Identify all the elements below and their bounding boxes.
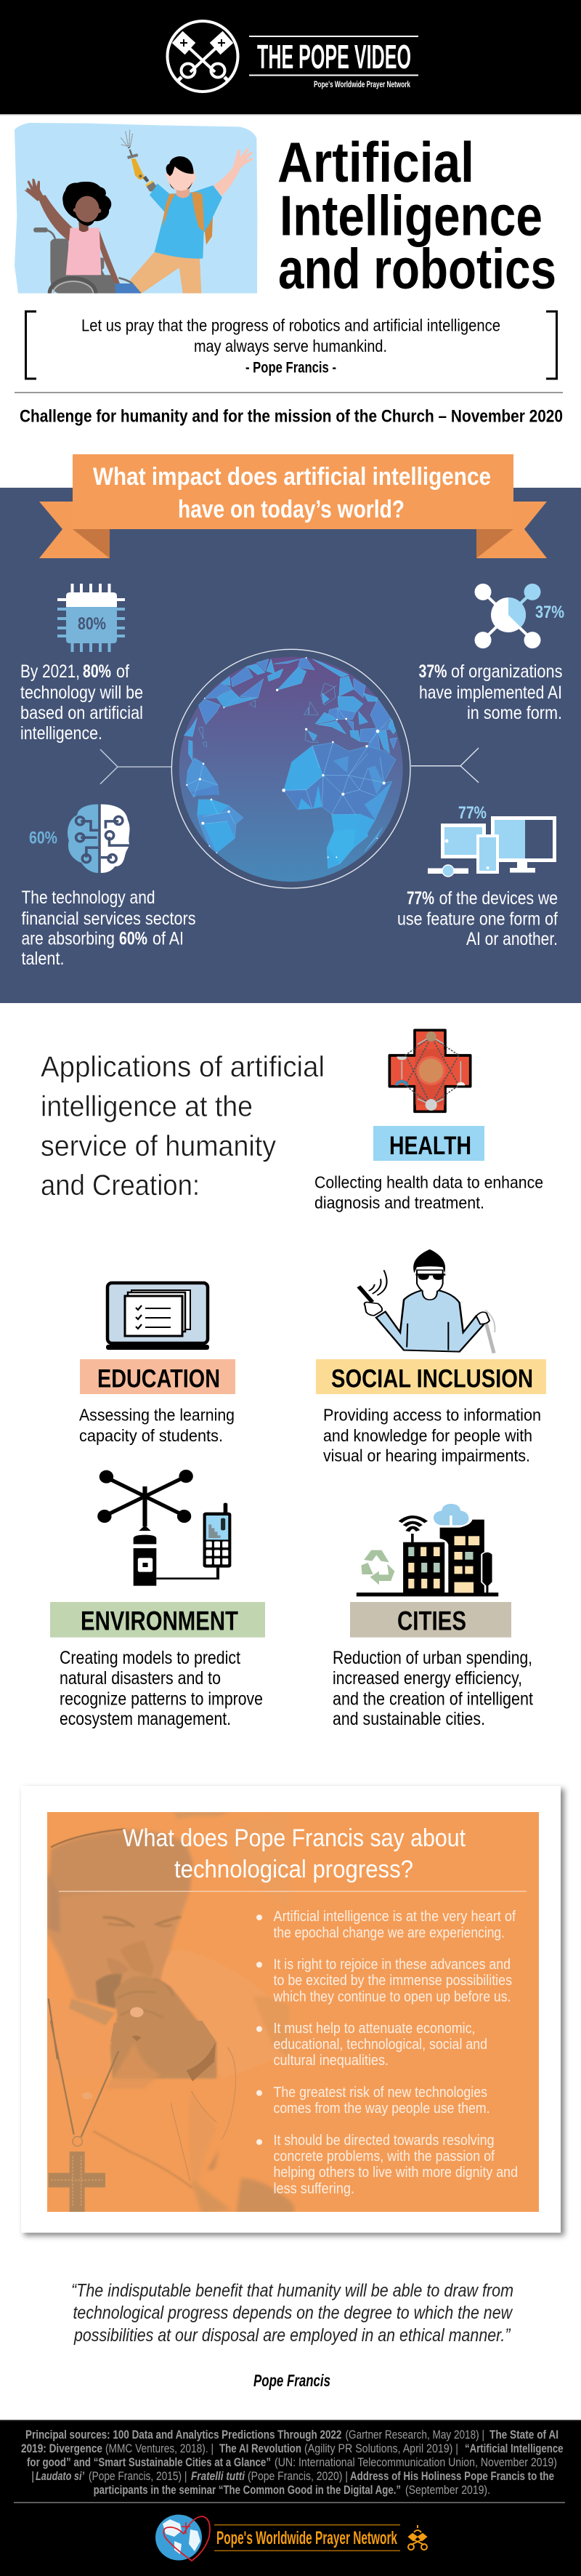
glow nodes xyxy=(186,657,386,858)
panel: environment xyxy=(50,1470,265,1729)
panel: social inclusion: SOCIAL INCLUSION xyxy=(331,1365,533,1393)
closing quote xyxy=(71,2280,513,2346)
icon: person with cane and phone xyxy=(359,1249,495,1353)
stat: 77%: AI or another. xyxy=(466,929,558,949)
prayer intention with brackets: may always serve humankind. xyxy=(194,337,387,355)
panel: environment: recognize patterns to improve xyxy=(60,1689,263,1710)
bullet list: Artificial intelligence is at the very heart of xyxy=(273,1909,516,1925)
stat: 60%: of AI xyxy=(153,929,184,949)
applications heading: and Creation: xyxy=(41,1170,200,1202)
bullet list: the epochal change we are experiencing. xyxy=(273,1925,505,1941)
photo: Pope Francis tinted xyxy=(47,1811,294,2215)
panel: environment: Creating models to predict xyxy=(60,1648,240,1668)
icon: chip 80% xyxy=(57,584,125,652)
closing quote: technological progress depends on the degree to which the new xyxy=(73,2303,513,2323)
icon: connector left xyxy=(100,749,171,784)
panel: cities: Reduction of urban spending, xyxy=(333,1648,532,1668)
applications heading: service of humanity xyxy=(41,1130,276,1162)
continent: europe and asia xyxy=(304,659,397,754)
applications heading: Applications of artificial xyxy=(41,1051,325,1083)
icon: laptop with checklist xyxy=(106,1283,209,1350)
sources: | xyxy=(31,2469,34,2483)
continent: south america xyxy=(187,758,243,853)
stat: 80%: intelligence. xyxy=(20,723,102,744)
icon: chip 80%: 80% xyxy=(78,614,106,634)
bullet list: It is right to rejoice in these advances and xyxy=(273,1957,511,1973)
stat: 80%: By 2021, xyxy=(20,661,80,682)
stat: 80%: 80% xyxy=(83,661,111,682)
main title: Artificial xyxy=(277,130,474,194)
panel: health: Collecting health data to enhance xyxy=(314,1173,543,1192)
closing quote: “The indisputable benefit that humanity will be able to draw from xyxy=(71,2280,513,2301)
sources: (Gartner Research, May 2018) | xyxy=(346,2428,484,2442)
icon: weather station and phone xyxy=(97,1470,231,1586)
panel: environment: ENVIRONMENT xyxy=(81,1606,238,1636)
bullet list: educational, technological, social and xyxy=(273,2037,487,2053)
panel heading: technological progress? xyxy=(174,1856,413,1883)
continent: north america xyxy=(184,658,314,761)
bullet list: It must help to attenuate economic, xyxy=(273,2021,475,2037)
continent: africa xyxy=(284,743,396,869)
icon: connector right xyxy=(411,748,479,783)
panel: social inclusion: Providing access to information xyxy=(323,1406,541,1425)
sources: 2019: Divergence xyxy=(21,2442,102,2455)
stat: 80%: based on artificial xyxy=(20,703,143,723)
header band xyxy=(0,0,581,115)
panel: environment: ecosystem management. xyxy=(60,1709,231,1729)
stat: 60%: are absorbing xyxy=(22,929,115,949)
stat: 60%: financial services sectors xyxy=(22,909,196,929)
stat: 60%: The technology and xyxy=(22,887,155,908)
sources: (MMC Ventures, 2018). | xyxy=(105,2442,214,2455)
bullet list: The greatest risk of new technologies xyxy=(273,2085,487,2101)
panel: health: diagnosis and treatment. xyxy=(314,1193,484,1212)
bullet list xyxy=(256,1909,518,2197)
sources: participants in the seminar “The Common Good in the Digital Age.” xyxy=(94,2483,401,2497)
prayer intention with brackets: - Pope Francis - xyxy=(245,359,336,377)
logo wordmark xyxy=(249,36,418,89)
sources: (September 2019). xyxy=(405,2483,490,2497)
wheelchair xyxy=(33,228,140,294)
quote attribution: Pope Francis xyxy=(253,2371,330,2390)
sources: (Pope Francis, 2015) | xyxy=(89,2469,187,2483)
closing quote: possibilities at our disposal are employed in an ethical manner.” xyxy=(73,2325,511,2346)
ribbon heading: What impact does artificial intelligence xyxy=(93,463,491,491)
stat: 80%: of xyxy=(116,661,129,682)
facets xyxy=(191,746,392,864)
sources: The AI Revolution xyxy=(219,2442,301,2455)
icon: brain 60%: 60% xyxy=(29,829,57,848)
sources xyxy=(21,2428,564,2497)
panel heading xyxy=(59,1824,527,1892)
ribbon heading: have on today’s world? xyxy=(178,496,405,523)
bullet list: to be excited by the immense possibilities xyxy=(273,1973,512,1989)
applications heading: intelligence at the xyxy=(41,1090,253,1122)
stat: 37%: of organizations xyxy=(451,661,562,682)
stat: 37%: 37% xyxy=(418,661,447,682)
panel: education: EDUCATION xyxy=(97,1365,220,1393)
bullet list: comes from the way people use them. xyxy=(273,2101,489,2117)
sources: for good” and “Smart Sustainable Cities at a Glance” xyxy=(27,2455,271,2469)
card: Pope Francis on technological progress xyxy=(21,1786,564,2236)
man xyxy=(130,148,253,294)
stat: 80%: technology will be xyxy=(20,683,143,703)
bullet list: It should be directed towards resolving xyxy=(273,2133,494,2149)
network wordmark: Pope's Worldwide Prayer Network xyxy=(216,2528,397,2548)
panel: cities: and the creation of intelligent xyxy=(333,1689,533,1710)
panel: education: Assessing the learning xyxy=(79,1406,235,1425)
icon: devices 77% xyxy=(428,803,555,877)
panel: environment: natural disasters and to xyxy=(60,1668,221,1689)
icon: brain 60% xyxy=(29,804,130,873)
woman xyxy=(24,179,140,294)
panel: cities xyxy=(333,1504,533,1729)
panel: cities: CITIES xyxy=(397,1606,466,1636)
panel: education xyxy=(79,1283,235,1445)
panel heading: What does Pope Francis say about xyxy=(123,1824,466,1852)
panel: AI impact xyxy=(0,488,581,1003)
stat: 60%: talent. xyxy=(22,949,64,969)
icon: keys and tiara xyxy=(408,2525,427,2550)
sources: Fratelli tutti xyxy=(191,2469,245,2483)
sources: Laudato si’ xyxy=(36,2469,84,2483)
stat: 37%: in some form. xyxy=(467,703,562,723)
stat: 77% xyxy=(397,888,558,949)
sources: The State of AI xyxy=(489,2428,558,2442)
robotic arm xyxy=(121,129,156,191)
ribbon heading xyxy=(39,454,547,558)
stat: 77%: 77% xyxy=(407,888,434,909)
illustration: two people with wheelchair and robotic arm xyxy=(15,123,257,294)
bullet list: which they continue to open up before us. xyxy=(273,1989,511,2005)
main title xyxy=(277,130,556,301)
icon: network pie 37% xyxy=(475,584,564,648)
stat: 80% xyxy=(20,661,143,744)
logo: crossed keys xyxy=(167,21,238,92)
icon: network pie 37%: 37% xyxy=(535,603,564,622)
panel: social inclusion xyxy=(316,1249,546,1465)
sources: (Agility PR Solutions, April 2019) | xyxy=(304,2442,458,2455)
stat: 77%: of the devices we xyxy=(439,888,558,909)
panel: social inclusion: and knowledge for people with xyxy=(323,1426,532,1445)
bullet list: helping others to live with more dignity and xyxy=(273,2165,518,2181)
logo wordmark: Pope's Worldwide Prayer Network xyxy=(314,79,410,89)
stat: 60%: 60% xyxy=(119,929,147,949)
applications heading xyxy=(41,1051,325,1202)
stat: 60% xyxy=(22,887,196,969)
logo wordmark: THE POPE VIDEO xyxy=(257,38,411,76)
logo: globe and heart xyxy=(155,2515,210,2561)
bullet list: cultural inequalities. xyxy=(273,2053,389,2069)
bullet list: concrete problems, with the passion of xyxy=(273,2149,495,2165)
wire lines xyxy=(187,685,391,824)
icon: medical cross xyxy=(389,1030,471,1111)
stat: 77%: use feature one form of xyxy=(397,909,558,930)
bullet list: less suffering. xyxy=(273,2181,354,2197)
sources: (Pope Francis, 2020) | xyxy=(248,2469,348,2483)
panel: social inclusion: visual or hearing impairments. xyxy=(323,1446,530,1465)
icon: devices 77%: 77% xyxy=(458,803,487,823)
sources: Principal sources: 100 Data and Analytics Predictions Through 2022 xyxy=(25,2428,341,2442)
prayer intention with brackets xyxy=(26,311,556,379)
icon: smart city xyxy=(357,1504,498,1596)
panel: cities: and sustainable cities. xyxy=(333,1709,485,1729)
globe xyxy=(171,649,410,888)
stat: 37% xyxy=(418,661,562,723)
panel: health xyxy=(314,1030,543,1212)
panel: cities: increased energy efficiency, xyxy=(333,1668,522,1689)
prayer intention with brackets: Let us pray that the progress of robotics and artificial intelligence xyxy=(81,315,500,334)
panel: health: HEALTH xyxy=(389,1132,471,1160)
footer xyxy=(0,2420,581,2576)
panel: education: capacity of students. xyxy=(79,1426,223,1445)
